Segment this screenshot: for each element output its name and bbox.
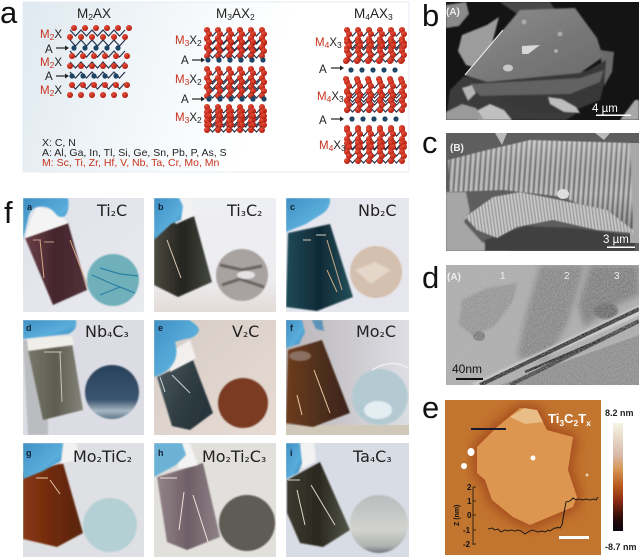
labels M2AX: 2 xyxy=(50,32,55,42)
labels M4AX3: 3 xyxy=(337,40,342,50)
panel letter f: f xyxy=(4,195,13,230)
region numbers: 1 xyxy=(500,271,506,282)
sample tag: f xyxy=(290,323,294,333)
heading M3AX2: M xyxy=(216,6,227,21)
panel letter e: e xyxy=(422,390,439,425)
heading M3AX2: 2 xyxy=(250,12,255,22)
photo g: Mo2TiC2 xyxy=(23,443,144,557)
height profile inset xyxy=(454,483,598,549)
upper layered band xyxy=(448,140,633,230)
bright particles xyxy=(461,448,588,476)
element legend: X: C, N xyxy=(42,137,76,149)
labels M4AX3: 3 xyxy=(339,94,344,104)
labels M2AX: A xyxy=(45,71,53,83)
photo e: V2C xyxy=(154,320,276,435)
label (B): (B) xyxy=(450,143,464,154)
sample name: Nb₂C xyxy=(358,201,397,220)
panel: AFM image e xyxy=(445,400,601,555)
labels M2AX: 2 xyxy=(50,88,55,98)
heading M3AX2: AX xyxy=(232,6,250,21)
crystal side face xyxy=(465,60,606,114)
sample tag: i xyxy=(290,448,293,458)
sample tag: b xyxy=(158,202,164,212)
lower layered band xyxy=(465,192,633,238)
photo d: Nb4C3 xyxy=(23,320,144,435)
labels M3AX2: 2 xyxy=(197,115,202,125)
labels M4AX3: X xyxy=(333,140,341,152)
labels M4AX3: 4 xyxy=(327,94,332,104)
colour scale: -8.7 nm xyxy=(605,542,637,552)
sample tag: e xyxy=(158,323,163,333)
panel: TEM image d xyxy=(446,265,640,385)
heading M4AX3: AX xyxy=(370,6,388,21)
surface debris xyxy=(522,45,540,54)
height profile inset: Z (nm) xyxy=(454,505,461,526)
labels M3AX2: 3 xyxy=(185,38,190,48)
labels M4AX3: A xyxy=(319,64,327,76)
sample tag: a xyxy=(27,202,33,212)
photo c: Nb2C xyxy=(286,198,409,312)
labels M2AX: X xyxy=(54,85,62,97)
labels M2AX: M xyxy=(40,57,55,70)
labels M3AX2: M xyxy=(175,35,190,48)
heading M4AX3: M xyxy=(354,6,365,21)
height profile inset: -2 xyxy=(463,540,471,549)
labels M3AX2 xyxy=(175,35,205,125)
label (A): (A) xyxy=(447,272,461,283)
labels M3AX2: A xyxy=(181,55,189,67)
labels M2AX: M xyxy=(40,85,55,98)
sample name: Ti₂C xyxy=(96,201,127,220)
scale bar: 4 µm xyxy=(592,103,618,115)
height profile inset: 2 xyxy=(467,483,472,492)
labels M4AX3: X xyxy=(329,37,337,49)
label Ti3C2Tx: x xyxy=(586,418,591,428)
scale bar xyxy=(603,234,635,248)
photo a: Ti2C xyxy=(23,198,144,312)
labels M4AX3: M xyxy=(315,37,330,50)
labels M4AX3: 4 xyxy=(329,143,334,153)
sample name: Mo₂Ti₂C₃ xyxy=(202,447,266,466)
labels M4AX3: X xyxy=(331,91,339,103)
region numbers: 2 xyxy=(564,271,570,282)
photo b: Ti3C2 xyxy=(154,198,276,312)
labels M2AX: X xyxy=(54,29,62,41)
sample tag: g xyxy=(26,448,32,458)
labels M3AX2: X xyxy=(189,74,197,86)
colour scale: 8.2 nm xyxy=(605,408,634,418)
sample tag: d xyxy=(26,323,32,333)
panel: SEM image c xyxy=(446,133,639,251)
labels M4AX3: A xyxy=(319,115,327,127)
crystal top face xyxy=(465,8,603,82)
labels M4AX3 xyxy=(315,37,346,153)
label Ti3C2Tx: Ti xyxy=(548,411,559,426)
labels M3AX2: 2 xyxy=(197,77,202,87)
flake xyxy=(477,408,577,525)
labels M2AX: M xyxy=(40,29,55,42)
height profile inset: 1 xyxy=(467,497,472,506)
heading M2AX: M xyxy=(77,6,88,21)
labels M3AX2: X xyxy=(189,112,197,124)
heading M4AX3: 3 xyxy=(388,12,393,22)
sample name: Nb₄C₃ xyxy=(85,322,129,341)
element legend xyxy=(42,137,227,169)
photo h: Mo2Ti2C3 xyxy=(154,443,276,557)
labels M4AX3: 4 xyxy=(325,40,330,50)
region numbers xyxy=(500,272,620,279)
labels M2AX: A xyxy=(45,44,53,56)
labels M2AX: 2 xyxy=(50,60,55,70)
element legend: M: Sc, Ti, Zr, Hf, V, Nb, Ta, Cr, Mo, Mn xyxy=(42,157,220,169)
heading M2AX: 2 xyxy=(88,12,93,22)
panel letter d: d xyxy=(422,260,439,295)
labels M3AX2: M xyxy=(175,74,190,87)
nanotube wall xyxy=(480,309,639,385)
element legend: A: Al, Ga, In, Tl, Si, Ge, Sn, Pb, P, As, S xyxy=(42,147,227,159)
sample name: Mo₂TiC₂ xyxy=(73,447,132,466)
labels M3AX2: X xyxy=(189,35,197,47)
labels M3AX2: M xyxy=(175,112,190,125)
labels M4AX3: 3 xyxy=(341,143,346,153)
height marker line xyxy=(471,428,506,430)
labels M4AX3: M xyxy=(319,140,334,153)
region numbers: 3 xyxy=(614,271,620,282)
sample name: Ta₄C₃ xyxy=(352,447,392,466)
crystal M4AX3 xyxy=(343,27,407,164)
panel letter c: c xyxy=(422,125,438,160)
scale bar xyxy=(452,364,483,380)
labels M4AX3: M xyxy=(317,91,332,104)
sample tag: c xyxy=(290,202,295,212)
sample name: V₂C xyxy=(232,322,259,341)
height profile inset: -1 xyxy=(463,526,471,535)
crystal M2AX xyxy=(67,25,132,98)
sample name: Ti₃C₂ xyxy=(226,201,262,220)
labels M3AX2: 3 xyxy=(185,115,190,125)
photo f: Mo2C xyxy=(286,320,409,435)
height profile inset: 0 xyxy=(467,511,472,520)
flakes xyxy=(446,2,469,28)
labels M3AX2: 3 xyxy=(185,77,190,87)
label Ti3C2Tx: C xyxy=(564,411,574,426)
heading M3AX2: 3 xyxy=(227,12,232,22)
heading M2AX: AX xyxy=(93,6,111,21)
sample tag: h xyxy=(158,448,164,458)
labels M3AX2: 2 xyxy=(197,38,202,48)
labels M2AX: X xyxy=(54,57,62,69)
label Ti3C2Tx: T xyxy=(578,411,586,426)
photo i: Ta4C3 xyxy=(286,443,409,557)
scale bar xyxy=(592,103,631,116)
sample name: Mo₂C xyxy=(356,322,396,341)
panel: SEM image b xyxy=(446,2,639,120)
label Ti3C2Tx: 2 xyxy=(573,418,578,428)
label (A): (A) xyxy=(446,7,460,18)
panel: MAX phase crystal structures xyxy=(23,2,409,172)
crystal M3AX2 xyxy=(204,27,267,133)
scale bar: 3 µm xyxy=(603,234,629,246)
label Ti3C2Tx: 3 xyxy=(559,418,564,428)
labels M3AX2: A xyxy=(181,94,189,106)
colour scale xyxy=(605,408,637,552)
scale bar: 40nm xyxy=(452,362,482,376)
scale bar xyxy=(559,536,589,539)
labels M2AX xyxy=(40,29,69,98)
heading M4AX3: 4 xyxy=(365,12,370,22)
